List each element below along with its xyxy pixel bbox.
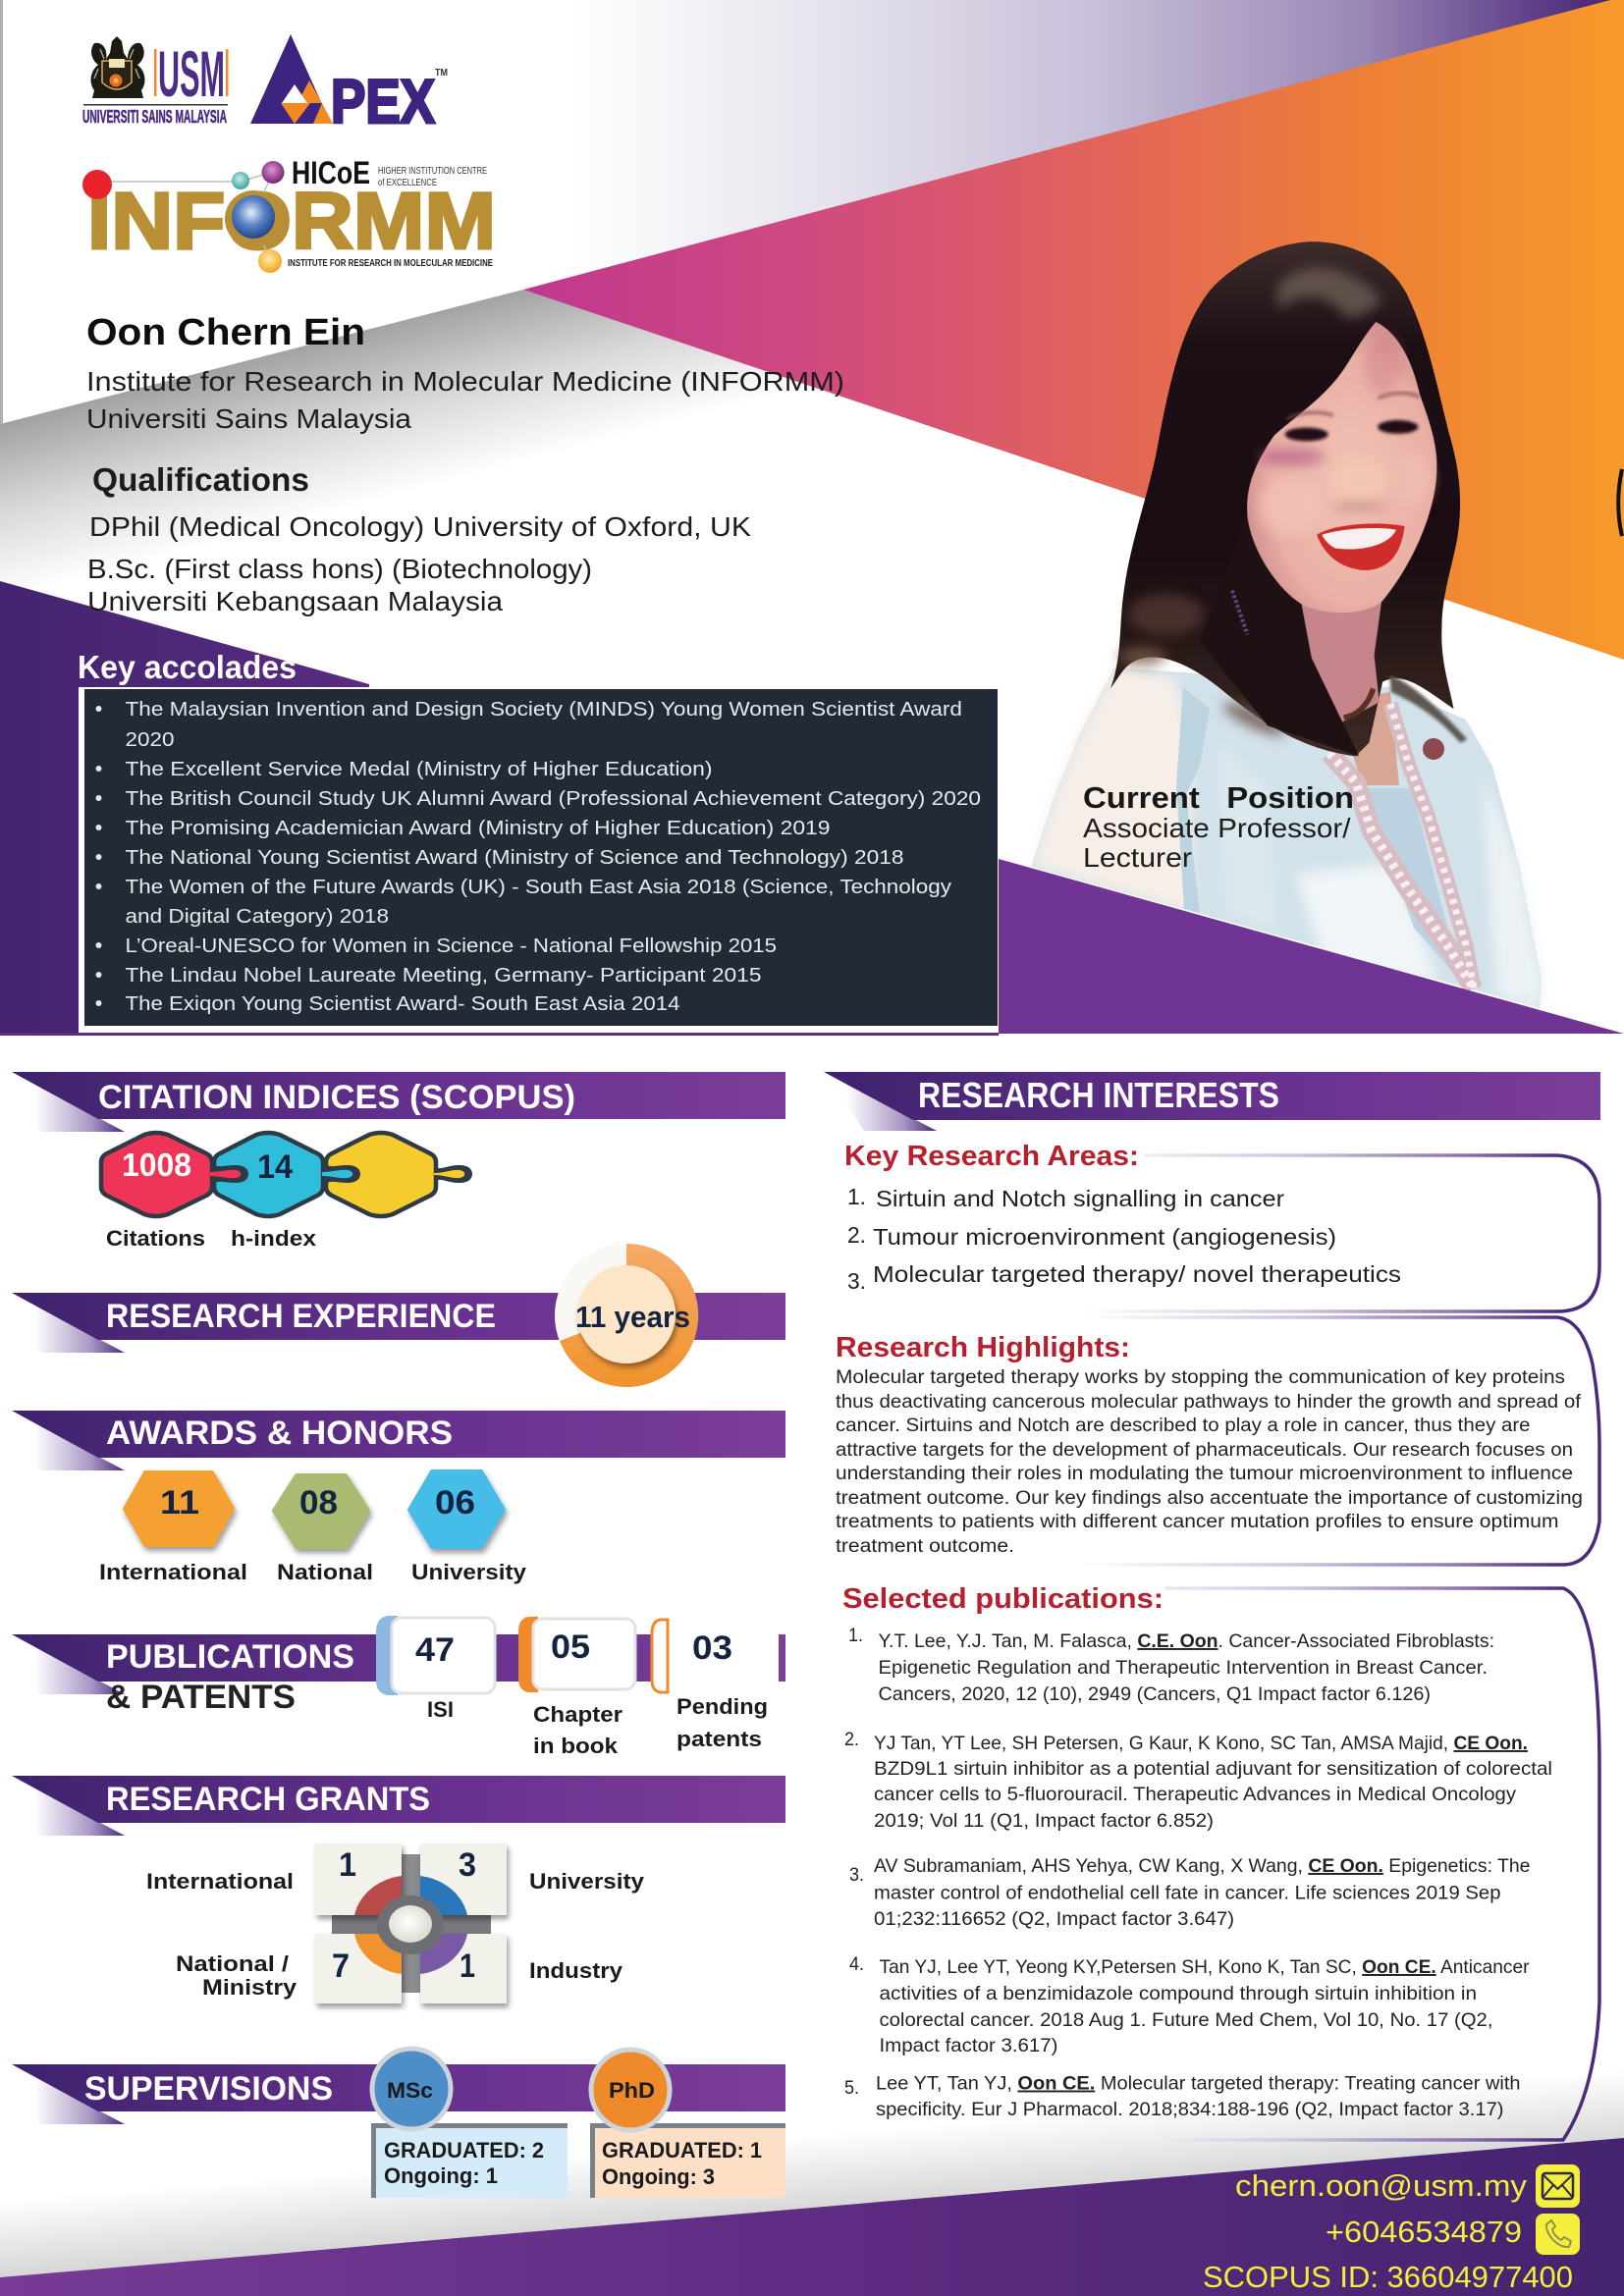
PhD badge: [591, 2050, 670, 2130]
qualifications list: [87, 511, 751, 616]
position title line 2: Lecturer: [1083, 842, 1192, 873]
panel: key research areas: [844, 1141, 1599, 1311]
USM bars: [154, 49, 228, 96]
section: publications and patents: [12, 1616, 785, 1758]
name: Oon Chern Ein: [86, 312, 365, 353]
patents tab: [652, 1620, 732, 1692]
publication 2: [844, 1729, 1552, 1832]
accolades list: The British Council Study UK Alumni Award (Professional Achievement Category) 2020: [126, 788, 981, 810]
publication 4: colorectal cancer. 2018 Aug 1. Future Med Chem, Vol 10, No. 17 (Q2,: [880, 2009, 1492, 2031]
icon: phone: [1536, 2214, 1580, 2255]
accolades bullets: [96, 706, 102, 1006]
publication 1: 1.: [848, 1625, 863, 1646]
hair strand right: [1389, 675, 1467, 743]
industry tile: [420, 1934, 507, 2003]
ISI card: [376, 1616, 495, 1695]
university tile: [420, 1843, 507, 1915]
eyes: [1285, 420, 1418, 441]
banner: [824, 1072, 1600, 1120]
publication 2: cancer cells to 5-fluorouracil. Therapeutic Advances in Medical Oncology: [874, 1784, 1516, 1805]
purple atom: [261, 161, 285, 184]
paragraph: treatment outcome.: [836, 1536, 1014, 1557]
blue arc: [420, 1876, 467, 1915]
ISI card: 47: [415, 1631, 455, 1669]
publication 5: specificity. Eur J Pharmacol. 2018;834:188-196 (Q2, Impact factor 3.17): [876, 2099, 1504, 2120]
background: bottom grey fade: [0, 2061, 1624, 2277]
white gap: [668, 1629, 779, 1684]
HICoE: HICoE: [292, 155, 370, 190]
panel: research highlights: [836, 1317, 1599, 1565]
patents label line 2: patents: [677, 1727, 762, 1751]
publication 2: YJ Tan, YT Lee, SH Petersen, G Kaur, K Kono, SC Tan, AMSA Majid, CE Oon.: [874, 1733, 1528, 1754]
accolades heading: Key accolades: [78, 649, 297, 685]
national label: National: [277, 1560, 373, 1584]
heading: RESEARCH EXPERIENCE: [106, 1298, 496, 1335]
logo: USM: [82, 36, 228, 127]
paragraph: Molecular targeted therapy works by stopping the communication of key proteins: [836, 1367, 1565, 1388]
PhD box: Ongoing: 3: [602, 2164, 715, 2189]
phone: +6046534879: [1326, 2215, 1522, 2249]
scopus id: SCOPUS ID: 36604977400: [1203, 2260, 1573, 2294]
accolades list: The Women of the Future Awards (UK) - South East Asia 2018 (Science, Technology: [126, 877, 951, 898]
heading line 2: & PATENTS: [106, 1679, 296, 1716]
banner flag: [12, 1293, 125, 1353]
publication 1: [848, 1625, 1494, 1705]
publication 3: 01;232:116652 (Q2, Impact factor 3.647): [874, 1908, 1234, 1930]
paragraph: attractive targets for the development of pharmaceuticals. Our research focuses on: [836, 1440, 1573, 1461]
INFORMM wordmark: INFORMM: [87, 177, 496, 266]
publication 3: AV Subramaniam, AHS Yehya, CW Kang, X Wang, CE Oon. Epigenetics: The: [874, 1855, 1530, 1877]
item list: [873, 1186, 1401, 1287]
paragraph: cancer. Sirtuins and Notch are described to play a role in cancer, thus they are: [836, 1415, 1530, 1436]
patents tab: 03: [692, 1629, 732, 1667]
publication 5: Lee YT, Tan YJ, Oon CE. Molecular targeted therapy: Treating cancer with: [876, 2073, 1520, 2095]
background: left edge line: [0, 0, 3, 424]
logo: APEX: [250, 34, 448, 136]
trademark: TM: [435, 68, 448, 79]
item numbers: 3.: [847, 1268, 866, 1294]
item numbers: 1.: [847, 1184, 866, 1209]
chapter card: 05: [551, 1629, 590, 1666]
accolades list: The Promising Academician Award (Ministry of Higher Education) 2019: [126, 818, 831, 839]
publication 2: 2019; Vol 11 (Q1, Impact factor 6.852): [874, 1810, 1214, 1832]
red hexagon: [101, 1133, 212, 1216]
red atom: [82, 170, 112, 199]
banner: [12, 1776, 785, 1823]
publication 2: BZD9L1 sirtuin inhibitor as a potential adjuvant for sensitization of colorectal: [874, 1758, 1552, 1780]
h-index value: 14: [257, 1148, 293, 1186]
purple arc: [420, 1934, 467, 1974]
white cap: [389, 1905, 432, 1943]
neck: [1298, 594, 1382, 725]
current position: [1083, 780, 1354, 873]
qualifications list: Universiti Kebangsaan Malaysia: [87, 586, 503, 616]
footer: contact details: [1203, 2164, 1580, 2294]
grey hub: [377, 1896, 444, 1954]
panel: key accolades: [0, 649, 999, 1036]
section: supervisions: [12, 2049, 785, 2198]
national label: National /: [176, 1951, 289, 1976]
banner: [12, 1072, 785, 1119]
photo: portrait of the researcher: [1031, 241, 1542, 1008]
paragraph: understanding their roles in modulating the tumour microenvironment to influence: [836, 1464, 1573, 1484]
face shading: [1258, 334, 1432, 535]
accolades list: The Lindau Nobel Laureate Meeting, Germany- Participant 2015: [126, 965, 761, 987]
photo: blouse: [1031, 667, 1542, 1008]
banner flag: [12, 1776, 125, 1836]
hair back: [1110, 241, 1460, 756]
publication 4: [849, 1953, 1530, 2056]
item list: Sirtuin and Notch signalling in cancer: [876, 1186, 1284, 1211]
panel outline: [1164, 1588, 1599, 2140]
publication 5: [844, 2073, 1520, 2120]
publication 4: 4.: [849, 1953, 864, 1975]
chapter label: Chapter: [533, 1702, 623, 1727]
banner flag: [12, 1634, 125, 1694]
publication 1: Epigenetic Regulation and Therapeutic Intervention in Breast Cancer.: [878, 1657, 1488, 1679]
USM name: UNIVERSITI SAINS MALAYSIA: [82, 107, 227, 127]
paragraph: [836, 1367, 1583, 1557]
banner flag: [12, 1411, 125, 1470]
accolades list: The Excellent Service Medal (Ministry of Higher Education): [126, 759, 713, 780]
publication 4: Impact factor 3.617): [880, 2035, 1058, 2056]
teal atom: [232, 172, 249, 189]
accolades list: and Digital Category) 2018: [126, 906, 389, 928]
MSc box: GRADUATED: 2: [384, 2138, 544, 2163]
panel: selected publications: [842, 1583, 1599, 2140]
panel background: [84, 689, 998, 1026]
background: left purple wedge: [0, 581, 369, 1036]
photo: inner top: [1364, 788, 1461, 982]
banner: [12, 2064, 785, 2111]
item numbers: [847, 1184, 866, 1294]
background: right purple wedge: [999, 859, 1624, 1034]
background speck at right edge: [1618, 469, 1622, 536]
blue connector: [322, 1164, 360, 1184]
grants diagram: [315, 1843, 507, 2003]
yellow hexagon: [326, 1133, 436, 1216]
APEX triangle A: [250, 34, 331, 124]
qualifications list: DPhil (Medical Oncology) University of Oxford, UK: [89, 511, 751, 542]
university label: University: [529, 1869, 645, 1894]
paragraph: treatment outcome. Our key findings also accentuate the importance of customizing: [836, 1488, 1583, 1509]
heading: AWARDS & HONORS: [106, 1415, 453, 1452]
publication 1: Y.T. Lee, Y.J. Tan, M. Falasca, C.E. Oon. Cancer-Associated Fibroblasts:: [878, 1630, 1494, 1652]
accolades list: 2020: [126, 729, 175, 751]
university: Universiti Sains Malaysia: [86, 403, 411, 434]
ring progress: [560, 1244, 698, 1387]
qualifications: [87, 461, 751, 616]
background: grey shadow wedge: [0, 290, 982, 687]
item numbers: 2.: [847, 1222, 866, 1248]
section: research interests banner: [824, 1072, 1600, 1131]
photo: brooch: [1423, 738, 1444, 760]
earring: [1232, 591, 1247, 634]
years value: 11 years: [575, 1300, 690, 1334]
icon: envelope: [1536, 2164, 1580, 2208]
banner: [12, 1293, 785, 1340]
red arc: [354, 1876, 402, 1915]
section: awards and honors: [12, 1411, 785, 1584]
section: citation indices: [12, 1072, 785, 1251]
section: research experience: [12, 1244, 785, 1387]
name and affiliation: [86, 312, 844, 434]
h-index label: h-index: [231, 1226, 317, 1251]
orange arc: [354, 1934, 402, 1974]
university hexagon: [409, 1471, 504, 1547]
national tile: [315, 1934, 402, 2003]
publication 5: 5.: [844, 2077, 859, 2099]
panel bottom line: [0, 1033, 999, 1036]
international tile: [315, 1843, 402, 1915]
photo: bead trim: [1329, 704, 1474, 988]
qualifications heading: Qualifications: [92, 461, 309, 498]
yellow connector: [434, 1165, 472, 1183]
MSc box: Ongoing: 1: [384, 2163, 498, 2188]
footer: purple band: [0, 2138, 1624, 2296]
banner flag: [12, 1072, 125, 1132]
international count: 11: [160, 1484, 199, 1522]
ring background: [555, 1244, 698, 1387]
national count: 08: [299, 1484, 338, 1522]
banner: [12, 1634, 785, 1682]
publication 2: 2.: [844, 1729, 859, 1750]
background: top gradient wedge: [491, 0, 1624, 290]
face: [1247, 322, 1436, 613]
heading: PUBLICATIONS: [106, 1638, 354, 1676]
chapter card: [518, 1617, 635, 1692]
APEX orange facets: [281, 80, 333, 124]
red connector: [210, 1164, 248, 1184]
position title: Associate Professor/: [1083, 813, 1351, 843]
university grants: 3: [459, 1846, 476, 1884]
hair lower highlights: [1119, 594, 1288, 741]
PhD badge: PhD: [609, 2078, 655, 2103]
MSc badge: MSc: [387, 2078, 433, 2103]
heading: Selected publications:: [842, 1583, 1164, 1615]
email: chern.oon@usm.my: [1235, 2168, 1528, 2203]
connector line: [97, 172, 273, 261]
heading: SUPERVISIONS: [84, 2070, 333, 2108]
HICoE description: HIGHER INSTITUTION CENTRE: [378, 166, 487, 177]
logo: INFORMM: [82, 155, 496, 273]
publication 4: Tan YJ, Lee YT, Yeong KY,Petersen SH, Kono K, Tan SC, Oon CE. Anticancer: [880, 1956, 1530, 1978]
banner flag: [824, 1072, 937, 1131]
panel border: [79, 687, 998, 1033]
accolades list: L’Oreal-UNESCO for Women in Science - National Fellowship 2015: [126, 935, 777, 957]
citations value: 1008: [122, 1147, 191, 1183]
heading: Key Research Areas:: [844, 1141, 1139, 1172]
ministry label: Ministry: [202, 1975, 298, 2000]
teeth: [1322, 528, 1396, 549]
section: research grants: [12, 1776, 785, 2003]
heading: RESEARCH GRANTS: [106, 1781, 430, 1818]
heading: RESEARCH INTERESTS: [918, 1075, 1279, 1115]
paragraph: treatments to patients with different cancer mutation profiles to ensure optimum: [836, 1512, 1559, 1532]
years ring: [555, 1244, 698, 1387]
INFORMM tagline: INSTITUTE FOR RESEARCH IN MOLECULAR MEDICINE: [288, 258, 493, 269]
item list: Tumour microenvironment (angiogenesis): [873, 1224, 1336, 1250]
USM rule: [83, 104, 228, 106]
international grants: 1: [339, 1846, 356, 1884]
item list: Molecular targeted therapy/ novel therapeutics: [873, 1261, 1401, 1287]
publication 3: master control of endothelial cell fate in cancer. Life sciences 2019 Sep: [874, 1883, 1501, 1904]
panel outline: [1070, 1317, 1599, 1565]
panel outline: [1081, 1155, 1599, 1311]
grey cross bar: [332, 1915, 491, 1934]
front hair lock: [1200, 512, 1359, 756]
background: orange pink wedge: [523, 0, 1624, 660]
industry grants: 1: [460, 1948, 475, 1985]
accolades list: The Malaysian Invention and Design Society (MINDS) Young Women Scientist Award: [126, 699, 962, 721]
ISI label: ISI: [427, 1697, 454, 1722]
international hexagon: [125, 1472, 233, 1545]
eyebrows: [1288, 393, 1418, 418]
heading: Research Highlights:: [836, 1332, 1130, 1363]
lips: [1317, 523, 1405, 570]
gold O ring: [225, 190, 282, 247]
institute: Institute for Research in Molecular Medicine (INFORMM): [86, 366, 844, 397]
international label: International: [99, 1560, 247, 1584]
crest: [91, 36, 144, 98]
yellow atom: [258, 249, 282, 273]
APEX wordmark: PEX: [331, 68, 435, 136]
citations label: Citations: [106, 1226, 205, 1251]
PhD box: [590, 2123, 785, 2198]
national grants: 7: [332, 1948, 350, 1985]
publication 4: activities of a benzimidazole compound through sirtuin inhibition in: [880, 1983, 1477, 2004]
university count: 06: [435, 1484, 475, 1522]
accolades list: [126, 699, 981, 1015]
international label: International: [146, 1869, 294, 1894]
blue atom: [232, 195, 275, 239]
publication 1: Cancers, 2020, 12 (10), 2949 (Cancers, Q1 Impact factor 6.126): [878, 1683, 1431, 1705]
publication 3: 3.: [849, 1864, 864, 1886]
necklace: [1344, 688, 1374, 718]
chapter label line 2: in book: [533, 1734, 619, 1758]
PhD box: GRADUATED: 1: [602, 2138, 762, 2163]
university label: University: [411, 1560, 527, 1584]
hair shine: [1277, 267, 1382, 318]
publication 3: [849, 1855, 1530, 1930]
grey cross: [402, 1854, 420, 1993]
text: USM: [158, 37, 225, 110]
banner flag: [12, 2064, 125, 2124]
heading: CITATION INDICES (SCOPUS): [98, 1079, 575, 1116]
accolades list: The National Young Scientist Award (Ministry of Science and Technology) 2018: [126, 847, 903, 869]
blue hexagon: [214, 1133, 323, 1216]
industry label: Industry: [529, 1958, 623, 1983]
chain of hexagons: [101, 1133, 436, 1216]
HICoE description: [378, 166, 487, 188]
qualifications list: B.Sc. (First class hons) (Biotechnology): [87, 554, 592, 584]
national hexagon: [274, 1475, 368, 1547]
patents label: Pending: [677, 1694, 768, 1719]
banner: [12, 1411, 785, 1458]
MSc box: [371, 2123, 568, 2198]
photo: head and hair: [1110, 241, 1467, 756]
blouse strap: [1176, 687, 1210, 913]
photo: chest skin: [1335, 692, 1399, 785]
ring centre: [577, 1265, 676, 1363]
HICoE description: of EXCELLENCE: [378, 178, 437, 188]
paragraph: thus deactivating cancerous molecular pathways to hinder the growth and spread of: [836, 1392, 1582, 1413]
position heading: Current Position: [1083, 780, 1354, 815]
accolades list: The Exiqon Young Scientist Award- South East Asia 2014: [126, 993, 679, 1015]
MSc badge: [372, 2049, 451, 2129]
